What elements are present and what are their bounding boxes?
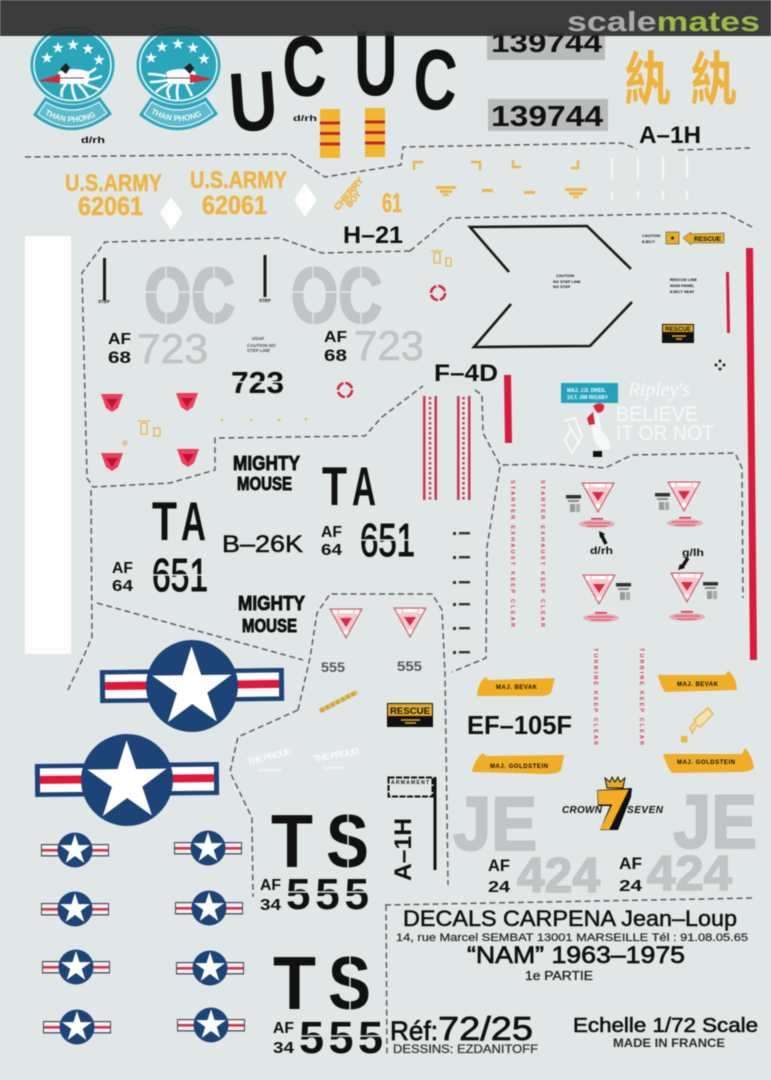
rooster cartoon [564, 403, 610, 457]
yellow name tag Bevak right: MAJ. BEVAK [677, 682, 719, 688]
Crown Seven logo [562, 777, 664, 830]
crew name tag teal [561, 383, 618, 403]
AF 34 lower: 34 [273, 1040, 294, 1057]
F-4D walkway outline [470, 226, 632, 347]
Vietnamese flag stripes [320, 108, 385, 158]
AF 64 left: 64 [112, 578, 133, 595]
U.S. Army markings right: U.S.ARMY [190, 167, 287, 194]
AF 24 left [488, 856, 510, 896]
reference number: 72/25 [438, 1010, 533, 1047]
white diamonds [160, 183, 317, 230]
calligraphy characters [624, 48, 737, 113]
AF 68 left [108, 331, 131, 367]
black antenna line left: STEP [98, 299, 110, 304]
AF 64 right: 64 [321, 542, 342, 559]
aircraft label: EF-105F: EF–105F [467, 710, 572, 740]
armament panel with line: ARMAMENT [391, 780, 429, 786]
yellow name tag Goldstein left [472, 753, 564, 774]
reference number: Réf: [390, 1016, 438, 1046]
Mighty Mouse lower: MIGHTY [238, 593, 306, 615]
yellow name tag Bevak left: MAJ. BEVAK [496, 685, 538, 691]
turbine text right: TURBINE KEEP CLEAR [638, 648, 644, 745]
serial 555 lower: 555 [299, 1012, 383, 1063]
armament panel with line [388, 777, 436, 870]
calligraphy characters: 紈 [624, 48, 671, 113]
small black stencil blocks: CAUTION [642, 233, 660, 238]
TA code left: T [152, 490, 177, 552]
black antenna line right [259, 255, 271, 303]
serial 651 right: 651 [360, 514, 415, 566]
label: d/rh with arrow [590, 531, 613, 557]
TS code lower: T [273, 941, 316, 1025]
white The Proud decals: SQUADRON [322, 765, 345, 770]
Ripley's believe it or not: Ripley's [627, 379, 690, 401]
TS code lower [273, 941, 371, 1025]
yellow name tag Goldstein right: MAJ. GOLDSTEIN [677, 760, 735, 766]
code letters U C U C [226, 11, 460, 151]
Ripley's believe it or not: BELIEVE [616, 403, 698, 426]
white tick decals [612, 156, 687, 200]
manufacturer heading: DECALS CARPENA Jean–Loup [403, 906, 737, 931]
reference number [390, 1010, 533, 1047]
grey serial 723 right: 723 [354, 322, 424, 369]
black antenna line right: STEP [259, 298, 271, 303]
rescue box: RESCUE [390, 706, 430, 716]
U.S. Army markings right [190, 167, 287, 220]
grey serial 555 pair: 555 [397, 658, 422, 674]
serial 651 left: 651 [152, 549, 208, 601]
aircraft label: B-26K: B–26K [222, 531, 303, 558]
white strip decal [25, 236, 71, 654]
Ripley's believe it or not: IT OR NOT [616, 422, 714, 445]
AF 24 left: AF [488, 856, 510, 875]
orange dots row [122, 418, 307, 446]
U.S. Army markings right: 62061 [202, 190, 267, 220]
AF 64 right: AF [321, 524, 342, 541]
grey serial 424 right: 424 [647, 847, 732, 901]
small black stencil blocks: EJECT SEAT [670, 289, 695, 294]
AF 34 upper: 34 [260, 897, 281, 914]
AF 68 left: AF [108, 331, 131, 348]
red roundel marks [338, 286, 445, 397]
yellow name tag Bevak left [477, 677, 555, 696]
turbine text left: TURBINE KEEP CLEAR [592, 648, 598, 745]
TS code upper [271, 799, 369, 883]
small black stencil blocks: MAIN PANEL [670, 283, 695, 288]
TA code left [152, 490, 206, 552]
Cherry Boy marking: CHERRY [332, 175, 365, 212]
emblem: Than Phong right: THAN PHONG [152, 108, 202, 122]
AF 24 left: 24 [488, 879, 510, 896]
code letters U C U C: U [226, 54, 281, 151]
Mighty Mouse lower [238, 593, 306, 636]
AF 24 right [619, 854, 642, 895]
rescue placard [662, 324, 694, 343]
sheet title: “NAM” 1963–1975 [467, 942, 685, 969]
grey serial 555 pair: 555 [321, 659, 345, 675]
grey serial 555 pair [321, 658, 422, 675]
top bar [0, 0, 771, 36]
TS code lower: S [328, 941, 371, 1025]
Ripley's believe it or not [616, 379, 714, 445]
made in France: MADE IN FRANCE [613, 1036, 725, 1050]
small black stencil blocks: NO STEP LINE [553, 279, 581, 284]
Crown Seven logo: CROWN [562, 805, 603, 816]
white The Proud decals: THE PROUD [313, 746, 360, 764]
AF 34 lower [273, 1020, 294, 1057]
small black stencil blocks: RESCUE LINE [670, 277, 697, 282]
address line: 14, rue Marcel SEMBAT 13001 MARSEILLE Tél : 91.08.05.65 [396, 932, 748, 944]
AF 34 lower: AF [273, 1020, 294, 1037]
small black stencil blocks [553, 233, 697, 294]
aircraft label: A-1H: A–1H [639, 122, 701, 149]
yellow outlined arrow [681, 708, 713, 742]
white The Proud decals: THE PROUD [246, 746, 294, 767]
starter exhaust text right: STARTER EXHAUST KEEP CLEAR [539, 480, 545, 627]
AF 64 left [112, 560, 133, 595]
small black marks column [453, 532, 470, 654]
white The Proud decals: SQUADRON [258, 767, 281, 772]
aircraft label: H-21: H–21 [343, 222, 403, 249]
OC code left: OC [144, 252, 235, 339]
AF 64 left: AF [112, 560, 133, 577]
AF 68 right: AF [324, 329, 347, 346]
yellow name tag Goldstein left: MAJ. GOLDSTEIN [490, 764, 548, 770]
label: d/rh with arrow: d/rh [590, 546, 613, 557]
pink data blurbs [579, 517, 705, 622]
AF 68 right: 68 [324, 346, 347, 365]
small black stencil blocks: NO STEP [553, 284, 571, 289]
rescue placard: RESCUE [665, 327, 691, 333]
label: g/lh with arrow: g/lh [682, 548, 704, 559]
AF 24 right: AF [619, 854, 642, 873]
small insignia scribble: USAF [252, 336, 265, 341]
TA code left: A [181, 490, 206, 552]
black serial 723: 723 [231, 365, 284, 400]
rescue arrow and yellow square: RESCUE [694, 237, 721, 243]
emblem: Than Phong left: THAN PHONG [46, 108, 96, 123]
black antenna line left [98, 258, 110, 304]
small national insignia set [41, 830, 245, 1044]
AF 34 upper [260, 877, 281, 914]
U.S. Army markings left: U.S.ARMY [65, 170, 162, 197]
AF 68 left: 68 [108, 348, 131, 367]
small insignia scribble [247, 336, 276, 353]
designer credit: DESSINS: EZDANITOFF [393, 1042, 538, 1056]
crosshair mark [714, 360, 726, 370]
AF 34 upper: AF [260, 877, 281, 894]
grey scribble stencils [566, 493, 718, 600]
JE code left: JE [453, 782, 537, 867]
Mighty Mouse upper: MIGHTY [233, 453, 301, 475]
yellow name tag Bevak right [658, 671, 737, 692]
AF 68 right [324, 329, 347, 365]
danger stripe left [423, 396, 437, 500]
U.S. Army markings left: 62061 [78, 191, 143, 221]
AF 64 right [321, 524, 342, 559]
part label: 1e PARTIE [525, 969, 593, 983]
Mighty Mouse upper: MOUSE [237, 474, 292, 494]
rescue arrow and yellow square [666, 232, 724, 245]
TA code right: T [322, 455, 347, 517]
grey serial 723 left: 723 [137, 325, 208, 372]
danger stripe right [457, 396, 470, 500]
pink triangle insignia group [330, 482, 703, 638]
aircraft label: A-1H vertical: A–1H [390, 818, 417, 881]
serial number top: 139744 [491, 28, 602, 58]
yellow stick decal [320, 692, 357, 711]
AF 24 right: 24 [619, 878, 642, 895]
logo: scalemates: scale mates [567, 6, 760, 37]
serial 555 upper: 555 [286, 870, 369, 919]
small insignia scribble: STEP LINE [247, 348, 270, 353]
TS code upper: T [271, 799, 313, 883]
small black stencil blocks: EJECT [642, 239, 655, 244]
code letters U C U C: C [411, 31, 460, 129]
small insignia scribble: CAUTION NO [247, 343, 276, 348]
JE code right: JE [673, 780, 757, 865]
national insignia large upper [99, 639, 285, 733]
white The Proud decals [246, 746, 360, 772]
number 61: 61 [382, 188, 402, 218]
crew name tag teal: MAJ. J.D. DREIL [567, 388, 606, 394]
calligraphy characters: 紈 [690, 48, 737, 113]
yellow name tag Goldstein right [663, 748, 754, 773]
red small triangles [101, 393, 199, 471]
aircraft label: F-4D: F–4D [434, 360, 498, 387]
label: g/lh with arrow [678, 548, 704, 570]
Mighty Mouse lower: MOUSE [242, 616, 297, 636]
Cherry Boy marking: BOY [344, 189, 363, 209]
U.S. Army markings left [65, 170, 162, 221]
label: d/rh by flags: d/rh [293, 113, 317, 123]
rescue box [387, 703, 433, 727]
crew name tag teal: 1/LT. JIM RIGSBY [567, 395, 609, 401]
serial number lower: 139744 [491, 101, 603, 133]
grey serial 424 left: 424 [517, 849, 600, 903]
small yellow stencils [436, 186, 587, 198]
code letters U C U C: U [354, 11, 398, 115]
TA code right: A [352, 455, 376, 517]
Crown Seven logo: SEVEN [627, 805, 664, 816]
emblem: Than Phong right [136, 26, 222, 131]
Mighty Mouse upper [233, 453, 301, 494]
OC code right: OC [291, 252, 382, 339]
starter exhaust text left: STARTER EXHAUST KEEP CLEAR [509, 480, 515, 627]
red vertical bars [504, 248, 757, 660]
TA code right [322, 455, 376, 517]
yellow small stencils [138, 251, 451, 436]
yellow corner marks [414, 160, 578, 170]
small black stencil blocks: CAUTION [556, 273, 574, 278]
emblem: Than Phong left [30, 26, 116, 131]
code letters U C U C: C [280, 17, 329, 115]
label: d/rh under emblem: d/rh [81, 135, 105, 145]
scale label: Echelle 1/72 Scale [573, 1015, 758, 1037]
TS code upper: S [326, 799, 369, 883]
national insignia large lower [35, 733, 219, 827]
